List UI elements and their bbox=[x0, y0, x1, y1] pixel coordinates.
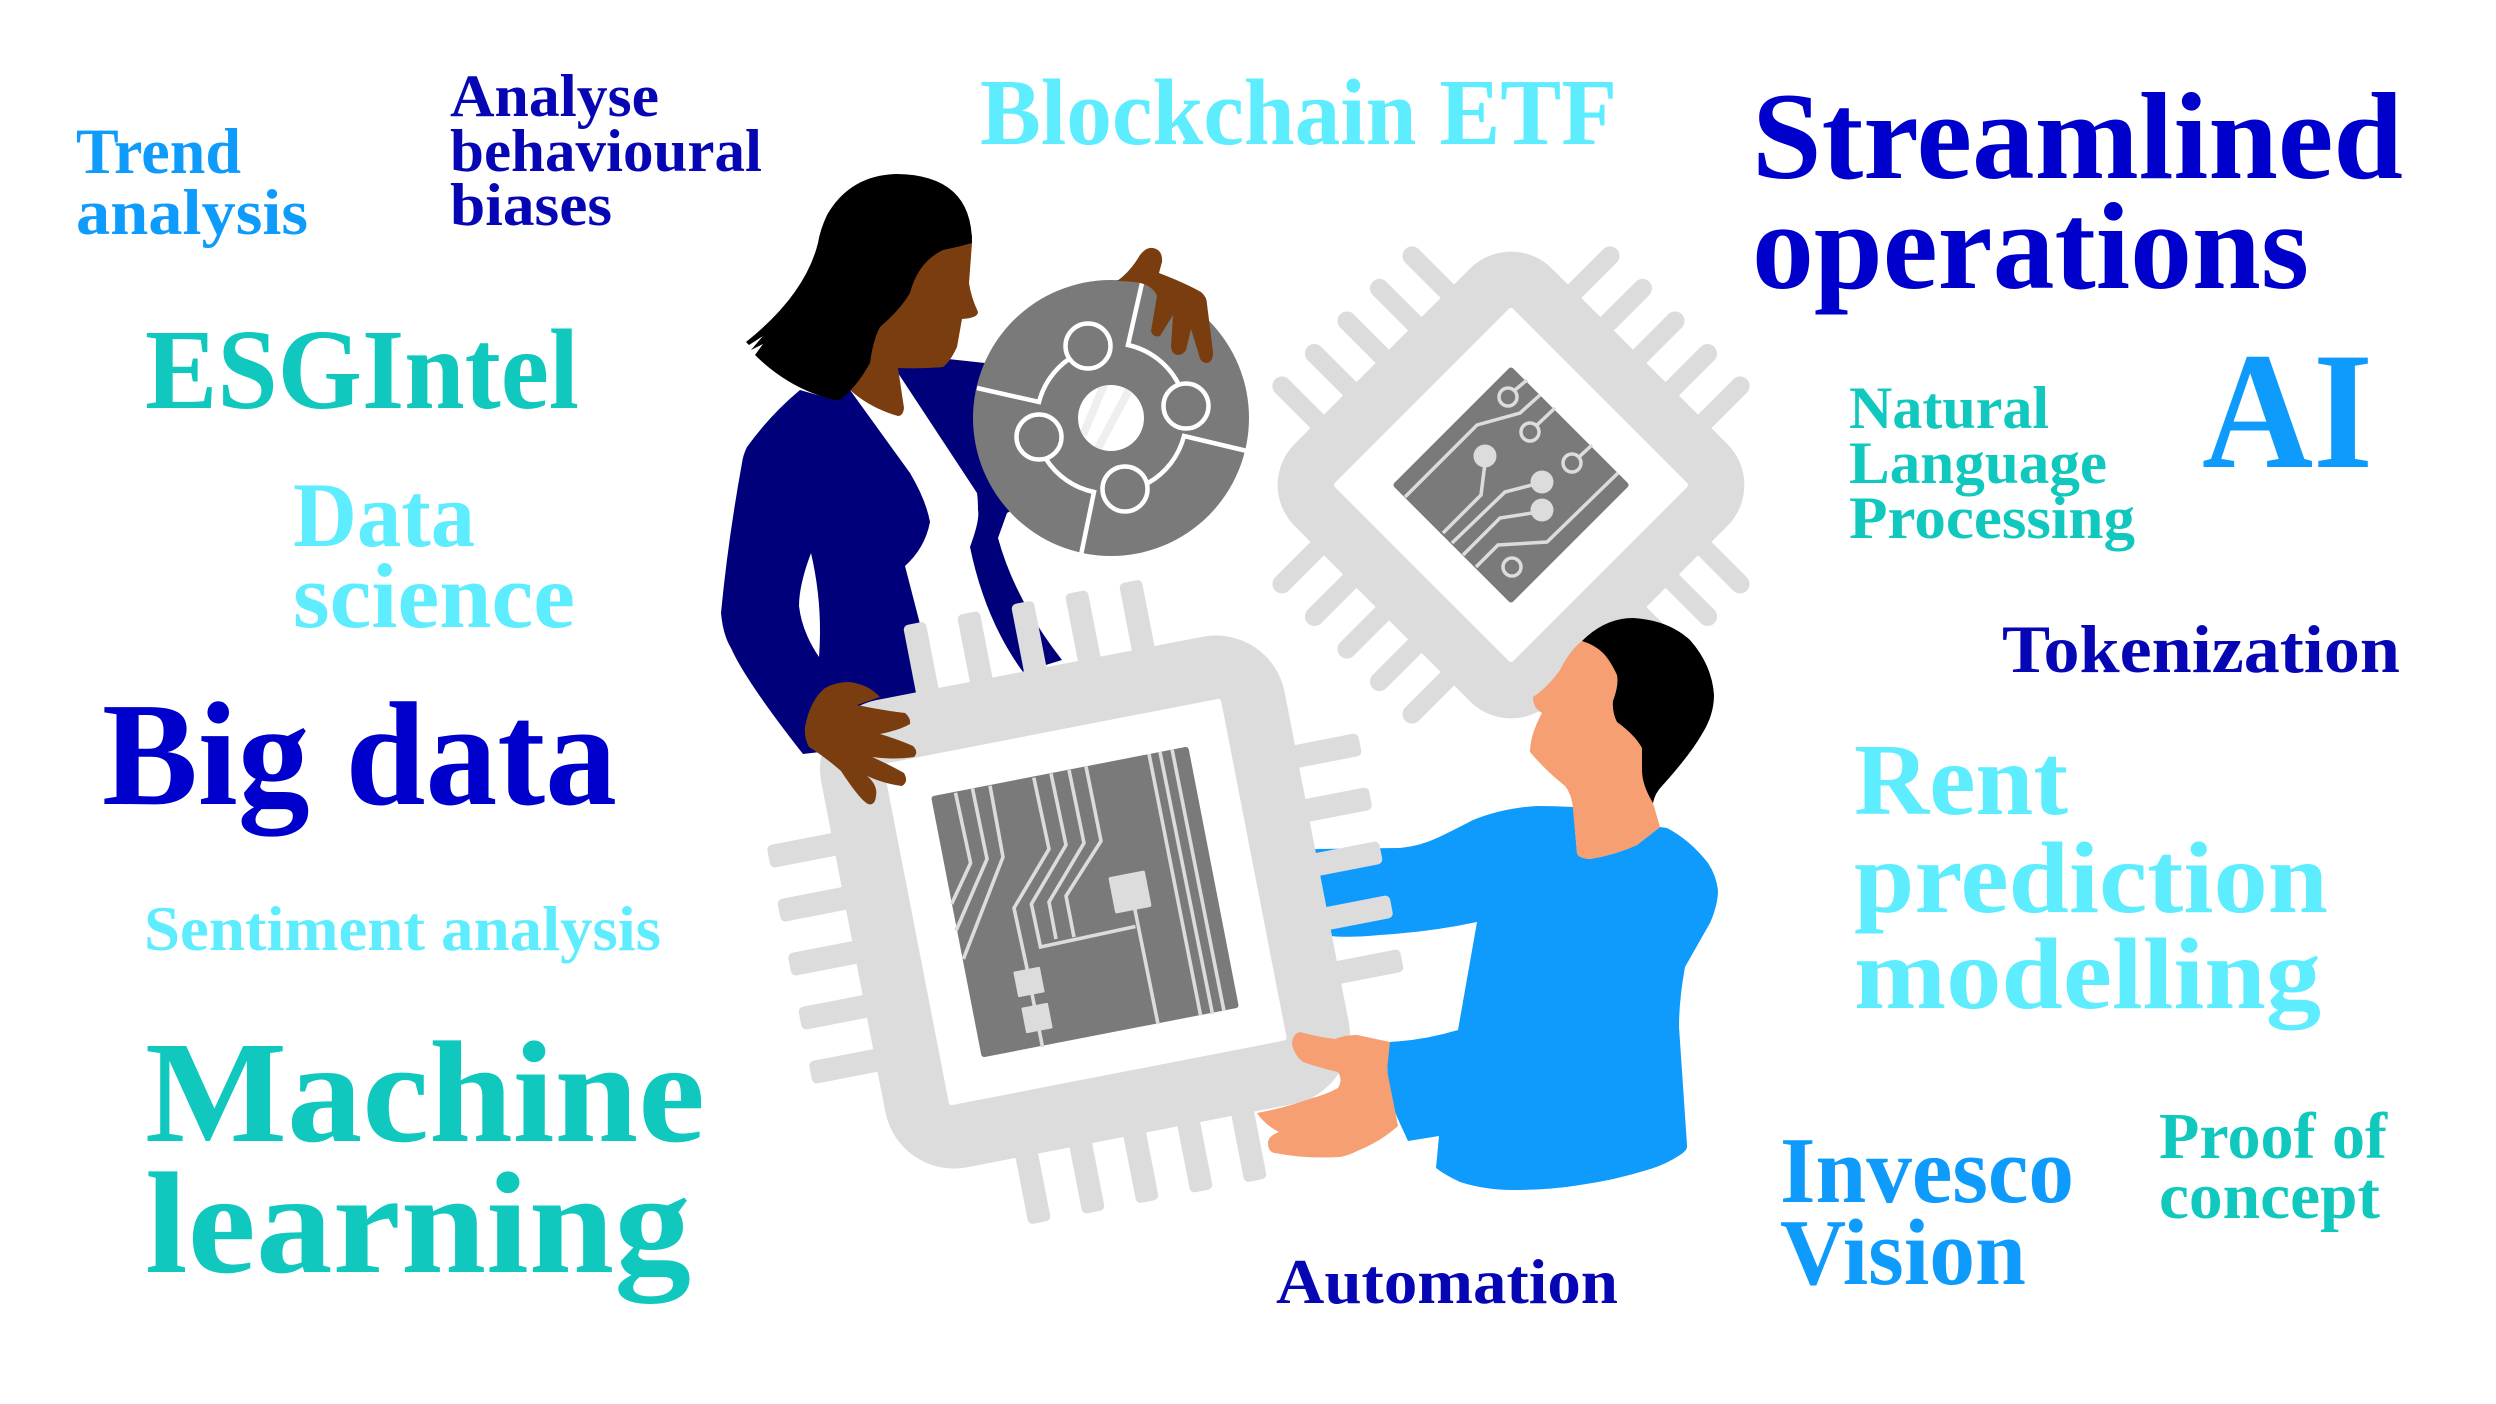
woman hand on disc bbox=[1117, 248, 1213, 363]
text: ESGIntel: ESGIntel bbox=[145, 306, 579, 433]
illustration: large chip in front bbox=[730, 544, 1438, 1260]
text: Analyse behavioural biases: biases bbox=[450, 172, 612, 238]
text: Rent prediction modelling: modelling bbox=[1854, 918, 2321, 1031]
text: Machine learning bbox=[145, 1013, 705, 1304]
text: AI: AI bbox=[2202, 319, 2373, 504]
text: Streamlined operations: operations bbox=[1752, 178, 2309, 315]
illustration: woman bbox=[721, 174, 1062, 754]
text: Trend analysis bbox=[76, 116, 308, 249]
text: Analyse behavioural biases bbox=[450, 63, 762, 238]
illustration: man bbox=[1315, 618, 1718, 1190]
text: Data science bbox=[293, 464, 575, 647]
text: Automation: Automation bbox=[1276, 1247, 1618, 1317]
text: Blockchain ETF: Blockchain ETF bbox=[980, 61, 1617, 165]
text: Sentiment analysis: Sentiment analysis bbox=[144, 894, 661, 964]
illustration: gear disc held by woman bbox=[973, 248, 1249, 556]
text: Rent prediction modelling: prediction bbox=[1854, 822, 2328, 935]
text: Proof of concept bbox=[2159, 1100, 2388, 1233]
text: Streamlined operations bbox=[1752, 68, 2403, 315]
woman face and neck bbox=[850, 235, 978, 416]
text: Data science: Data bbox=[293, 464, 475, 566]
text: Big data: Big data bbox=[102, 673, 617, 837]
woman hand on chip bbox=[805, 682, 916, 804]
text: Natural Language Processing: Processing bbox=[1849, 485, 2135, 551]
text: Invesco Vision: Vision bbox=[1780, 1201, 2026, 1305]
man sweater bbox=[1315, 806, 1718, 1190]
text: Analyse behavioural biases: Analyse bbox=[450, 63, 659, 129]
text: Rent prediction modelling bbox=[1854, 724, 2328, 1031]
text: Natural Language Processing: Natural bbox=[1849, 375, 2049, 441]
woman hair bbox=[746, 174, 972, 401]
illustration: chip behind (rotated 45 degrees) bbox=[1183, 157, 1839, 813]
text: Trend analysis: analysis bbox=[76, 177, 308, 249]
text: Natural Language Processing bbox=[1849, 375, 2135, 551]
text: Machine learning: learning bbox=[145, 1144, 691, 1304]
text: Rent prediction modelling: Rent bbox=[1854, 724, 2068, 837]
text: Proof of concept: concept bbox=[2159, 1160, 2380, 1233]
text: Tokenization: Tokenization bbox=[2002, 611, 2400, 687]
man face and neck bbox=[1530, 640, 1665, 859]
man hand on chip bbox=[1257, 1032, 1398, 1158]
text: Proof of concept: Proof of bbox=[2159, 1100, 2388, 1173]
text: Streamlined operations: Streamlined bbox=[1752, 68, 2403, 205]
woman jacket bbox=[721, 359, 1062, 754]
text: Natural Language Processing: Language bbox=[1849, 430, 2107, 496]
text: Invesco Vision bbox=[1780, 1119, 2074, 1305]
text: Invesco Vision: Invesco bbox=[1780, 1119, 2074, 1223]
text: Machine learning: Machine bbox=[145, 1013, 705, 1173]
text: Data science: science bbox=[293, 545, 575, 647]
text: Analyse behavioural biases: behavioural bbox=[450, 118, 762, 184]
text: Trend analysis: Trend bbox=[76, 116, 241, 188]
man hair bbox=[1582, 618, 1714, 803]
